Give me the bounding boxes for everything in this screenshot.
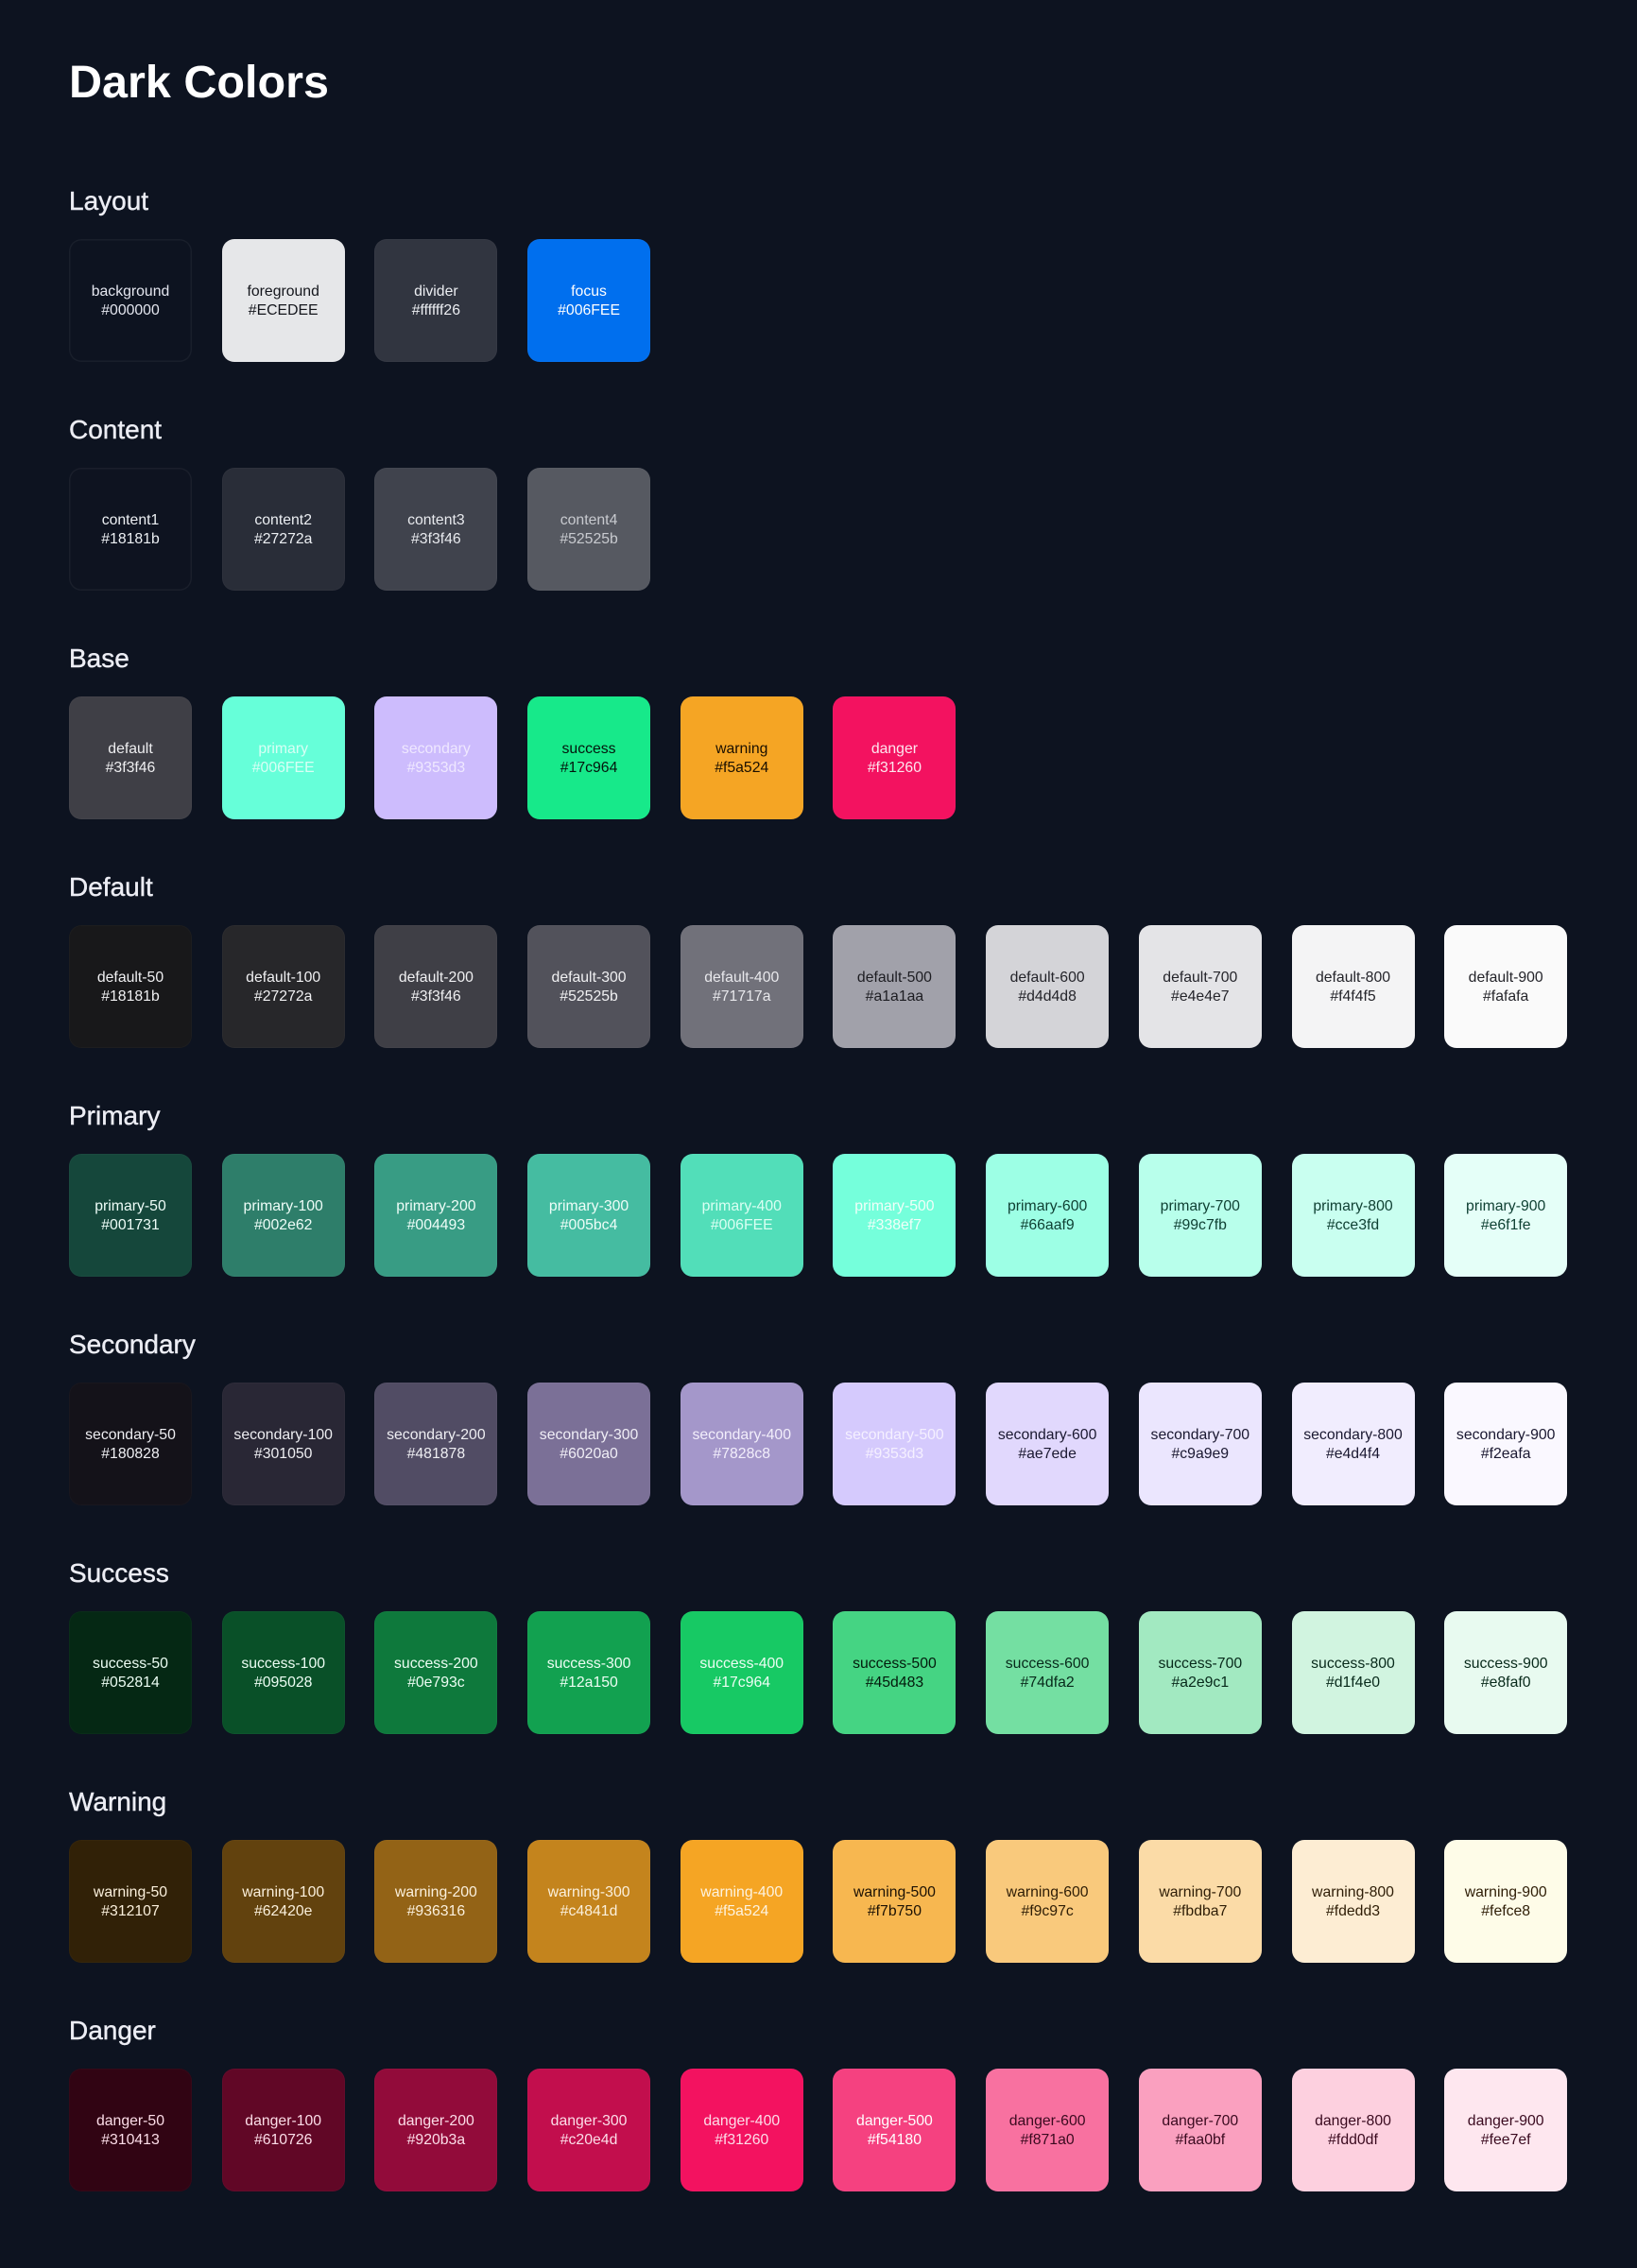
swatch: success-300 [527, 1611, 650, 1734]
heading: warning: Warning [69, 1787, 166, 1816]
swatch: warning: #f5a524 [715, 760, 768, 776]
swatch: secondary-300: #6020a0 [560, 1446, 618, 1462]
swatch: primary-900: primary-900 [1466, 1198, 1545, 1214]
swatch: warning-50 [69, 1840, 192, 1963]
heading: danger: Danger [69, 2016, 156, 2045]
swatch: primary-800: primary-800 [1313, 1198, 1393, 1214]
swatch: default-900: default-900 [1469, 970, 1543, 986]
swatch: secondary-500: #9353d3 [866, 1446, 923, 1462]
swatch: secondary-900: secondary-900 [1456, 1427, 1555, 1443]
swatch: primary-900 [1444, 1154, 1567, 1277]
swatch: content4 [527, 468, 650, 591]
swatch: warning-200: warning-200 [395, 1884, 477, 1900]
swatch: warning-500: warning-500 [853, 1884, 936, 1900]
swatch: success-600 [986, 1611, 1109, 1734]
swatch: warning-500: #f7b750 [868, 1903, 922, 1919]
swatch: success-200: #0e793c [407, 1675, 465, 1691]
swatch: default-200: default-200 [399, 970, 474, 986]
heading: primary: Primary [69, 1101, 160, 1130]
swatch: primary-500 [833, 1154, 956, 1277]
heading: default: Default [69, 872, 153, 902]
swatch: success-500 [833, 1611, 956, 1734]
swatch: danger: danger [871, 741, 918, 757]
swatch: default-700: #e4e4e7 [1171, 988, 1230, 1005]
heading: secondary: Secondary [69, 1330, 196, 1359]
swatch: focus [527, 239, 650, 362]
swatch: default-400: default-400 [704, 970, 779, 986]
swatch: default: default [108, 741, 153, 757]
swatch: danger-200: danger-200 [398, 2113, 474, 2129]
swatch: danger-500: danger-500 [856, 2113, 933, 2129]
swatch: content4: #52525b [560, 531, 618, 547]
panel: primary [69, 1101, 1567, 1277]
swatch: success-50 [69, 1611, 192, 1734]
swatch: danger-600: #f871a0 [1021, 2132, 1075, 2148]
swatch: warning-100 [222, 1840, 345, 1963]
swatch: primary-300: primary-300 [549, 1198, 629, 1214]
swatch: content1: content1 [102, 512, 159, 528]
swatch: primary-600: #66aaf9 [1021, 1217, 1075, 1233]
swatch: secondary-500 [833, 1383, 956, 1505]
swatch: default-800: #f4f4f5 [1330, 988, 1376, 1005]
swatch: primary-200: #004493 [407, 1217, 465, 1233]
swatch: success-400: success-400 [699, 1656, 784, 1672]
swatch: danger-300 [527, 2069, 650, 2191]
swatch: warning-100: warning-100 [242, 1884, 324, 1900]
swatch row: content [69, 468, 650, 591]
swatch: success-100: #095028 [254, 1675, 312, 1691]
swatch: primary-700 [1139, 1154, 1262, 1277]
swatch: success-900: #e8faf0 [1481, 1675, 1531, 1691]
swatch: danger-500: #f54180 [868, 2132, 922, 2148]
swatch: content3 [374, 468, 497, 591]
swatch: warning-50: #312107 [101, 1903, 160, 1919]
swatch: secondary-900 [1444, 1383, 1567, 1505]
swatch: secondary: secondary [402, 741, 471, 757]
swatch row: layout [69, 239, 650, 362]
swatch: background: #000000 [101, 302, 160, 318]
swatch: warning-900 [1444, 1840, 1567, 1963]
swatch: success-400 [681, 1611, 803, 1734]
panel: warning [68, 1787, 1567, 1963]
swatch: default-700: default-700 [1163, 970, 1237, 986]
swatch: primary-300 [527, 1154, 650, 1277]
swatch: danger-400: #f31260 [715, 2132, 768, 2148]
swatch: warning-700: #fbdba7 [1173, 1903, 1227, 1919]
swatch: success-500: success-500 [853, 1656, 937, 1672]
swatch: danger-600 [986, 2069, 1109, 2191]
swatch: secondary-400: secondary-400 [692, 1427, 791, 1443]
swatch: danger-800: danger-800 [1315, 2113, 1391, 2129]
swatch: default-300: #52525b [560, 988, 618, 1005]
swatch: success-800: success-800 [1311, 1656, 1395, 1672]
swatch: danger-800: #fdd0df [1328, 2132, 1378, 2148]
swatch: danger-200 [374, 2069, 497, 2191]
swatch: primary-600 [986, 1154, 1109, 1277]
swatch: danger-700: danger-700 [1162, 2113, 1238, 2129]
swatch: danger-700 [1139, 2069, 1262, 2191]
panel: secondary [69, 1330, 1567, 1505]
swatch: success-700: #a2e9c1 [1172, 1675, 1229, 1691]
swatch: content2 [222, 468, 345, 591]
swatch: primary-100: primary-100 [244, 1198, 323, 1214]
swatch: default-500: #a1a1aa [866, 988, 923, 1005]
swatch: primary-300: #005bc4 [560, 1217, 617, 1233]
swatch: success-800: #d1f4e0 [1326, 1675, 1380, 1691]
swatch: default-300: default-300 [552, 970, 627, 986]
swatch: content3: #3f3f46 [411, 531, 461, 547]
swatch: warning-600: #f9c97c [1021, 1903, 1074, 1919]
swatch: warning-900: warning-900 [1465, 1884, 1547, 1900]
swatch: warning-400 [681, 1840, 803, 1963]
swatch: focus: #006FEE [558, 302, 620, 318]
swatch: primary-100 [222, 1154, 345, 1277]
swatch: warning-400: warning-400 [700, 1884, 783, 1900]
swatch: background [69, 239, 192, 362]
swatch: content3: content3 [407, 512, 465, 528]
swatch: secondary-600: #ae7ede [1018, 1446, 1077, 1462]
swatch: primary-500: primary-500 [854, 1198, 935, 1214]
swatch: primary-50 [69, 1154, 192, 1277]
swatch: default-100: #27272a [254, 988, 312, 1005]
swatch: primary-100: #002e62 [254, 1217, 312, 1233]
swatch: danger-200: #920b3a [407, 2132, 465, 2148]
swatch: warning-300: warning-300 [548, 1884, 630, 1900]
swatch: secondary-800 [1291, 1383, 1414, 1505]
swatch: secondary-300 [527, 1383, 650, 1505]
swatch: secondary-400 [681, 1383, 803, 1505]
swatch: primary-50: primary-50 [95, 1198, 166, 1214]
swatch: secondary-50: #180828 [101, 1446, 160, 1462]
panel: content [69, 415, 650, 591]
swatch: default-200: #3f3f46 [411, 988, 461, 1005]
swatch: default-400: #71717a [713, 988, 770, 1005]
swatch: success: success [562, 741, 616, 757]
swatch: background: background [92, 284, 169, 300]
swatch: primary-900: #e6f1fe [1481, 1217, 1531, 1233]
swatch: warning-400: #f5a524 [715, 1903, 768, 1919]
swatch: success-700: success-700 [1158, 1656, 1242, 1672]
swatch: content2: #27272a [254, 531, 312, 547]
swatch: secondary-800: #e4d4f4 [1326, 1446, 1380, 1462]
swatch: danger-50: #310413 [101, 2132, 160, 2148]
swatch: primary-700: primary-700 [1161, 1198, 1240, 1214]
swatch: warning: warning [715, 741, 767, 757]
swatch: danger-300: #c20e4d [560, 2132, 617, 2148]
swatch: success-200: success-200 [394, 1656, 478, 1672]
swatch: content1 [69, 468, 192, 591]
swatch: danger-400: danger-400 [703, 2113, 780, 2129]
swatch: danger-300: danger-300 [551, 2113, 627, 2129]
swatch: danger [833, 696, 956, 819]
swatch: warning-300: #c4841d [560, 1903, 617, 1919]
swatch: warning-900: #fefce8 [1481, 1903, 1530, 1919]
swatch: foreground: #ECEDEE [249, 302, 319, 318]
swatch: primary-800 [1291, 1154, 1414, 1277]
swatch: default: #3f3f46 [106, 760, 155, 776]
panel: default [69, 872, 1567, 1048]
swatch: danger-900 [1444, 2069, 1567, 2191]
heading: success: Success [69, 1558, 169, 1588]
swatch: primary-400: #006FEE [711, 1217, 773, 1233]
swatch: primary: #006FEE [252, 760, 315, 776]
swatch: default-900 [1444, 925, 1567, 1048]
panel: success [69, 1558, 1567, 1734]
swatch: default-600: default-600 [1010, 970, 1085, 986]
swatch: content4: content4 [560, 512, 617, 528]
swatch: warning-800: #fdedd3 [1326, 1903, 1380, 1919]
swatch row: default [69, 925, 1567, 1048]
panel: danger [69, 2016, 1567, 2191]
swatch: secondary-700: secondary-700 [1151, 1427, 1249, 1443]
panel: layout [69, 186, 650, 362]
swatch: default-300 [527, 925, 650, 1048]
swatch: primary: primary [258, 741, 308, 757]
swatch: success: #17c964 [560, 760, 617, 776]
swatch: default-500: default-500 [857, 970, 932, 986]
swatch: danger-50: danger-50 [96, 2113, 164, 2129]
swatch: default [69, 696, 192, 819]
swatch: danger-100: #610726 [254, 2132, 312, 2148]
swatch: success [527, 696, 650, 819]
swatch: content2: content2 [254, 512, 312, 528]
swatch: primary-400 [681, 1154, 803, 1277]
heading: content: Content [69, 415, 162, 444]
swatch: success-800 [1291, 1611, 1414, 1734]
swatch: content1: #18181b [101, 531, 160, 547]
swatch: danger-800 [1291, 2069, 1414, 2191]
swatch: focus: focus [571, 284, 607, 300]
swatch: primary-800: #cce3fd [1327, 1217, 1379, 1233]
swatch: default-600: #d4d4d8 [1018, 988, 1077, 1005]
swatch: primary-200 [374, 1154, 497, 1277]
swatch: danger-100: danger-100 [245, 2113, 321, 2129]
swatch: danger-500 [833, 2069, 956, 2191]
swatch: primary-700: #99c7fb [1174, 1217, 1227, 1233]
swatch: danger-700: #faa0bf [1175, 2132, 1225, 2148]
swatch: default-800: default-800 [1316, 970, 1390, 986]
swatch: secondary: #9353d3 [407, 760, 465, 776]
swatch: default-500 [833, 925, 956, 1048]
swatch: danger-600: danger-600 [1009, 2113, 1086, 2129]
swatch: success-500: #45d483 [866, 1675, 923, 1691]
swatch: success-400: #17c964 [713, 1675, 770, 1691]
swatch: success-100 [222, 1611, 345, 1734]
swatch: secondary-900: #f2eafa [1481, 1446, 1531, 1462]
swatch: success-300: #12a150 [560, 1675, 618, 1691]
swatch: default-900: #fafafa [1483, 988, 1528, 1005]
swatch: danger-50 [69, 2069, 192, 2191]
panel: base [69, 644, 956, 819]
swatch: primary-500: #338ef7 [868, 1217, 922, 1233]
swatch: secondary-600: secondary-600 [998, 1427, 1096, 1443]
heading: layout: Layout [69, 186, 148, 215]
swatch: default-100 [222, 925, 345, 1048]
swatch: warning-600 [986, 1840, 1109, 1963]
swatch: foreground [222, 239, 345, 362]
swatch: primary-50: #001731 [101, 1217, 160, 1233]
swatch: warning-800: warning-800 [1312, 1884, 1394, 1900]
swatch: divider: divider [414, 284, 458, 300]
swatch row: danger [69, 2069, 1567, 2191]
swatch: primary-400: primary-400 [702, 1198, 782, 1214]
swatch: warning-700: warning-700 [1159, 1884, 1241, 1900]
swatch: success-600: #74dfa2 [1021, 1675, 1075, 1691]
swatch: default-50: default-50 [97, 970, 164, 986]
swatch: secondary-200: #481878 [407, 1446, 465, 1462]
swatch: warning-500 [833, 1840, 956, 1963]
swatch: warning-600: warning-600 [1007, 1884, 1089, 1900]
swatch: secondary-100: #301050 [254, 1446, 312, 1462]
swatch: secondary-100: secondary-100 [233, 1427, 333, 1443]
swatch: warning-100: #62420e [254, 1903, 312, 1919]
swatch: danger-400 [681, 2069, 803, 2191]
swatch: secondary-500: secondary-500 [845, 1427, 944, 1443]
swatch row: success [69, 1611, 1567, 1734]
swatch: warning-700 [1139, 1840, 1262, 1963]
swatch: secondary-300: secondary-300 [540, 1427, 638, 1443]
swatch: success-300: success-300 [547, 1656, 630, 1672]
swatch: secondary-200: secondary-200 [387, 1427, 486, 1443]
swatch row: warning [69, 1840, 1567, 1963]
swatch: primary-200: primary-200 [396, 1198, 476, 1214]
swatch: success-50: success-50 [93, 1656, 168, 1672]
swatch: success-100: success-100 [241, 1656, 325, 1672]
swatch: default-600 [986, 925, 1109, 1048]
swatch: default-100: default-100 [246, 970, 320, 986]
swatch: secondary-50: secondary-50 [85, 1427, 176, 1443]
swatch: divider: #ffffff26 [412, 302, 460, 318]
swatch: success-900 [1444, 1611, 1567, 1734]
swatch: success-900: success-900 [1464, 1656, 1548, 1672]
heading: base: Base [69, 644, 129, 673]
swatch: warning [681, 696, 803, 819]
swatch: default-200 [374, 925, 497, 1048]
swatch row: base [69, 696, 956, 819]
swatch: default-800 [1291, 925, 1414, 1048]
swatch: success-50: #052814 [101, 1675, 160, 1691]
swatch: default-50 [69, 925, 192, 1048]
swatch: primary-600: primary-600 [1008, 1198, 1087, 1214]
swatch: secondary [374, 696, 497, 819]
swatch: danger-100 [222, 2069, 345, 2191]
swatch: warning-200: #936316 [407, 1903, 465, 1919]
swatch: default-400 [681, 925, 803, 1048]
swatch: danger-900: #fee7ef [1481, 2132, 1531, 2148]
swatch: secondary-400: #7828c8 [713, 1446, 770, 1462]
swatch: foreground: foreground [247, 284, 319, 300]
swatch: success-200 [374, 1611, 497, 1734]
title: Dark Colors [69, 57, 329, 108]
swatch: warning-50: warning-50 [94, 1884, 167, 1900]
swatch: secondary-50 [69, 1383, 192, 1505]
swatch: secondary-100 [222, 1383, 345, 1505]
swatch: secondary-200 [374, 1383, 497, 1505]
swatch: warning-800 [1291, 1840, 1414, 1963]
swatch: default-50: #18181b [101, 988, 160, 1005]
swatch: warning-200 [374, 1840, 497, 1963]
swatch: primary [222, 696, 345, 819]
swatch: success-600: success-600 [1006, 1656, 1089, 1672]
swatch row: primary [69, 1154, 1567, 1277]
swatch: divider [374, 239, 497, 362]
swatch: secondary-800: secondary-800 [1303, 1427, 1403, 1443]
swatch: danger-900: danger-900 [1468, 2113, 1544, 2129]
swatch: success-700 [1139, 1611, 1262, 1734]
swatch row: secondary [69, 1383, 1567, 1505]
swatch: warning-300 [527, 1840, 650, 1963]
swatch: danger: #f31260 [868, 760, 922, 776]
swatch: default-700 [1139, 925, 1262, 1048]
swatch: secondary-600 [986, 1383, 1109, 1505]
swatch: secondary-700: #c9a9e9 [1171, 1446, 1229, 1462]
swatch: secondary-700 [1139, 1383, 1262, 1505]
